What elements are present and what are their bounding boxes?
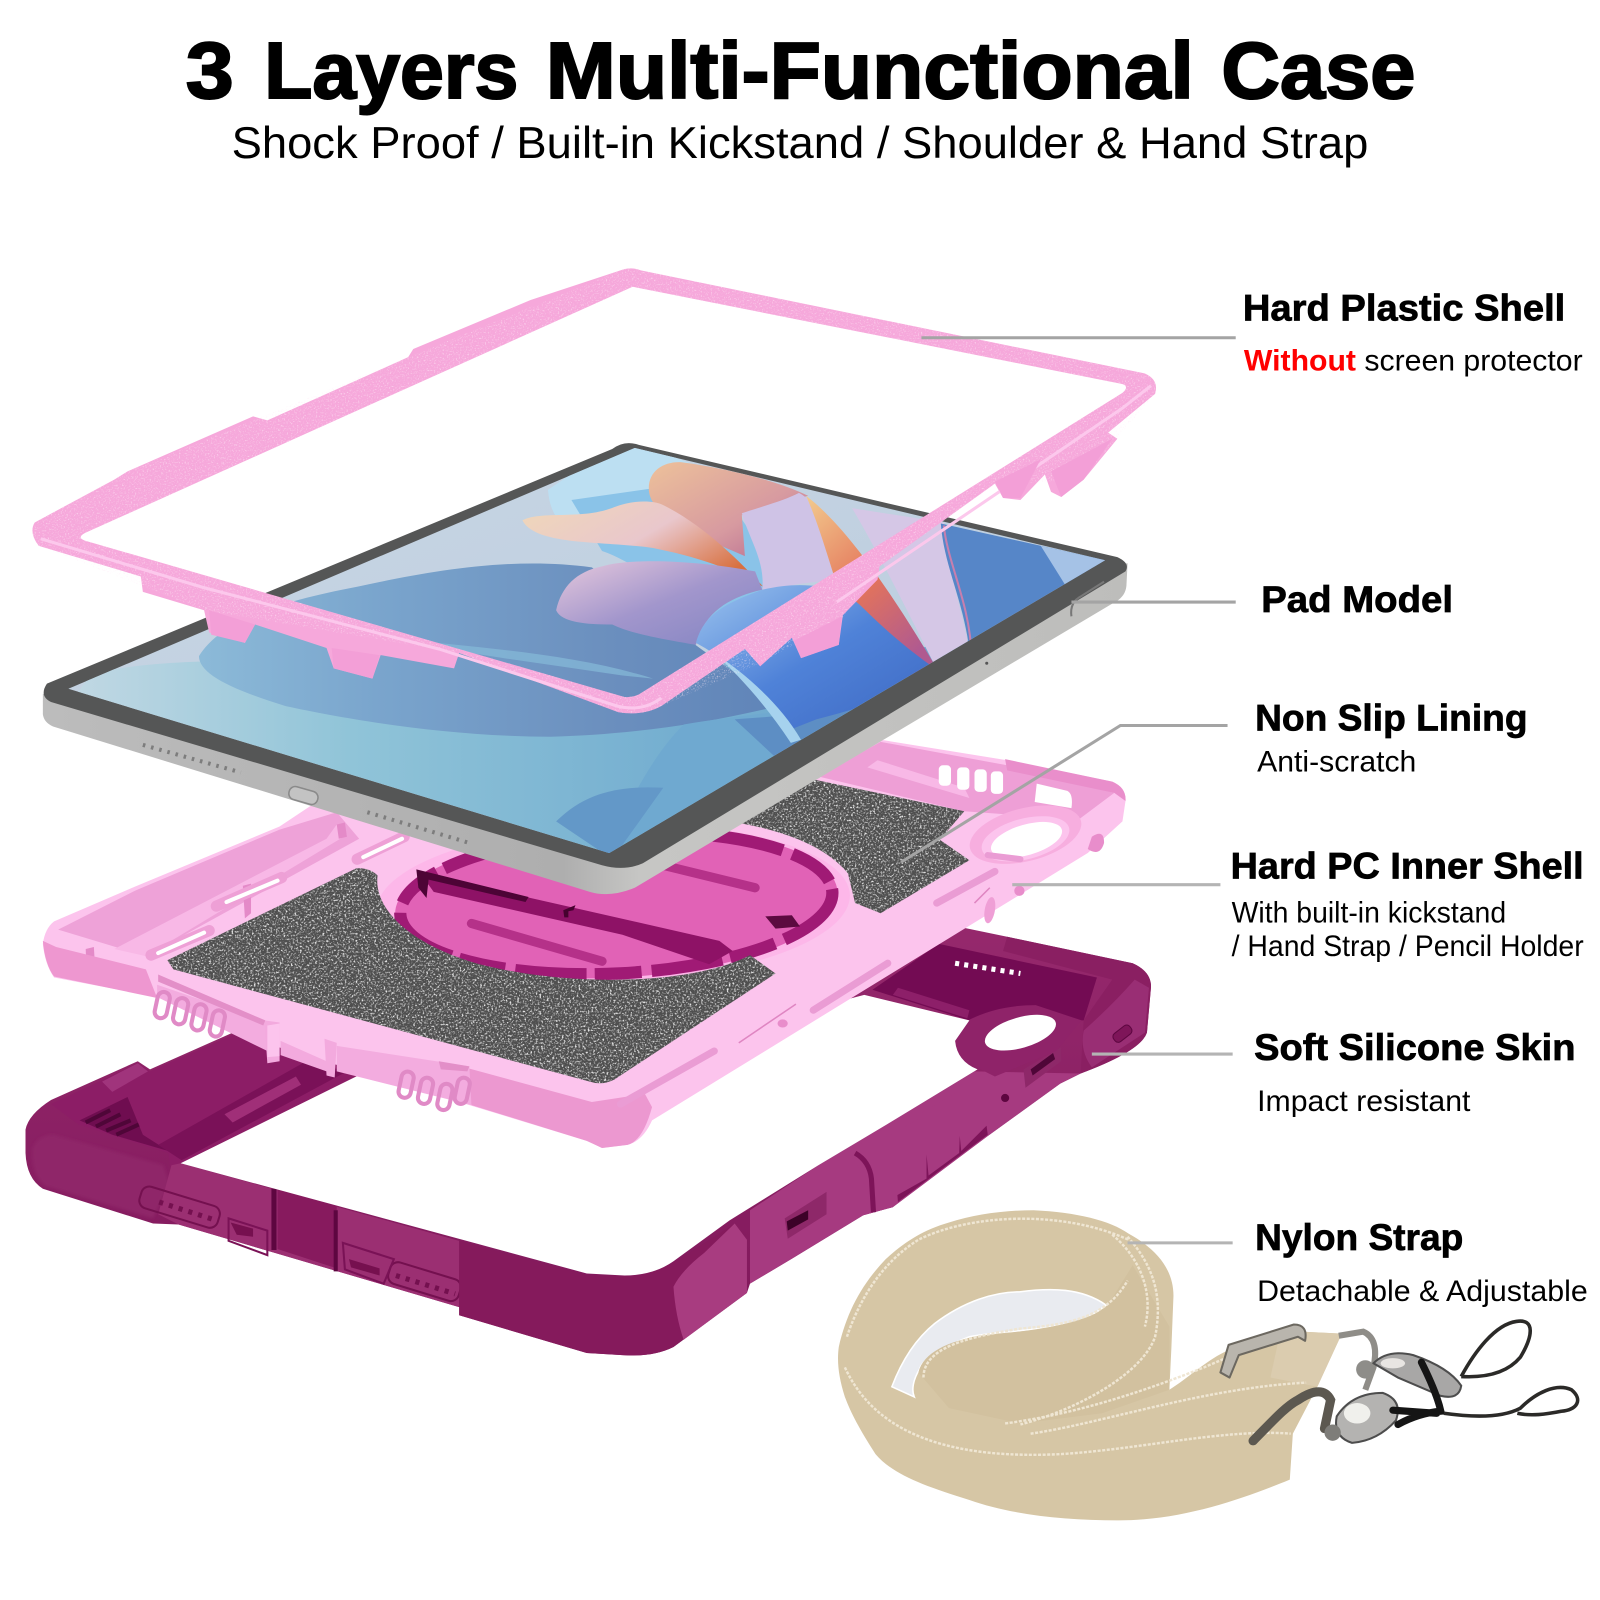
leader line: soft silicone skin	[1092, 1053, 1233, 1056]
heading: Soft Silicone Skin	[1254, 1027, 1576, 1068]
right side strip	[750, 1071, 1081, 1284]
lower right wave	[606, 696, 874, 853]
description: Without screen protector	[1244, 344, 1583, 377]
orange streak	[806, 496, 934, 682]
blue lower petal	[696, 585, 931, 731]
usb port	[287, 785, 319, 806]
magenta disc	[391, 817, 841, 989]
metal hook lower	[1253, 1392, 1331, 1441]
side button	[1071, 582, 1104, 616]
left tray posts	[86, 822, 347, 982]
title: Multi-Functional	[546, 26, 1194, 115]
hard plastic shell frame	[29, 265, 1161, 719]
leader line: hard PC inner shell	[1012, 883, 1220, 886]
frame bevel highlight	[41, 386, 1151, 708]
label: soft silicone skin	[1254, 1027, 1576, 1118]
cord loop lower	[1444, 1387, 1578, 1416]
left tray	[58, 812, 359, 956]
inner opening	[181, 995, 978, 1276]
description: Anti-scratch	[1257, 745, 1416, 778]
bottom vents	[153, 991, 471, 1111]
camera loop	[954, 1005, 1082, 1077]
big blue swoop	[199, 563, 786, 737]
light upper wash	[548, 448, 690, 515]
frame teeth	[209, 439, 1112, 679]
heading: Hard Plastic Shell	[1243, 287, 1565, 328]
camera opening	[981, 1008, 1060, 1057]
lilac lower petal	[556, 561, 762, 645]
leader line: nylon strap	[1128, 1241, 1233, 1244]
screen	[68, 448, 1105, 853]
heading: Hard PC Inner Shell	[1231, 846, 1584, 887]
description line 2: / Hand Strap / Pencil Holder	[1232, 930, 1584, 963]
metal slider	[1220, 1324, 1306, 1378]
frame speckle	[29, 265, 1161, 719]
description: Impact resistant	[1257, 1085, 1470, 1118]
strap stitch highlights	[845, 1219, 1306, 1455]
shell base	[43, 740, 1126, 1148]
heading: Nylon Strap	[1255, 1217, 1463, 1258]
hard PC inner shell layer	[43, 740, 1126, 1148]
label: hard plastic shell	[1243, 287, 1583, 377]
front side wall	[43, 941, 157, 998]
swivel clasps	[1373, 1353, 1461, 1397]
right rim slots	[620, 871, 995, 1104]
centre lilac petal	[742, 493, 833, 590]
speaker grille right	[386, 1260, 463, 1303]
top right corner	[1003, 937, 1151, 1073]
label: pad model: Pad Model	[1261, 579, 1453, 620]
strap body	[838, 1210, 1342, 1520]
label: hard PC inner shell	[1231, 846, 1584, 963]
label: nylon strap	[1255, 1217, 1588, 1308]
blue centre petal	[572, 489, 763, 622]
soft silicone skin layer	[26, 918, 1151, 1355]
right tray windows	[939, 765, 1072, 808]
silicone body	[26, 918, 1151, 1355]
left peach petal	[522, 501, 763, 587]
button cut-outs	[231, 1222, 380, 1276]
front right corner	[459, 1223, 747, 1355]
label: non slip lining	[1255, 698, 1528, 778]
strap opening	[892, 1290, 1106, 1397]
leader line: non slip lining	[901, 726, 1228, 862]
silver body	[43, 563, 1128, 894]
leader line: pad model	[1071, 601, 1236, 604]
top peach petal	[649, 462, 808, 556]
cyan lower area	[78, 640, 969, 853]
right tray	[818, 742, 1114, 827]
right blue panel	[941, 523, 1105, 651]
connector tabs	[264, 1020, 337, 1078]
leader line: hard plastic shell	[921, 336, 1236, 339]
speaker grille left	[137, 1184, 222, 1230]
cord loop upper	[1461, 1321, 1530, 1377]
black cord	[1393, 1362, 1441, 1424]
speaker holes	[143, 745, 472, 844]
strap shading	[918, 1265, 1169, 1423]
description: Detachable & Adjustable	[1257, 1275, 1588, 1308]
description line 1: With built-in kickstand	[1232, 896, 1506, 929]
non slip lining	[167, 780, 969, 1083]
left corner interior	[51, 1020, 362, 1168]
wallpaper	[61, 439, 1105, 878]
centre edge strip	[158, 1163, 459, 1307]
ring rim	[374, 816, 853, 990]
title: Layers	[264, 26, 518, 115]
camera ring	[964, 795, 1087, 874]
title	[186, 26, 1415, 115]
title: Case	[1221, 26, 1415, 115]
pad model layer	[43, 439, 1128, 894]
bezel	[44, 443, 1127, 868]
heading: Non Slip Lining	[1255, 698, 1528, 739]
metal hook upper	[1339, 1332, 1375, 1390]
ring teeth	[397, 821, 836, 985]
nylon strap	[838, 1210, 1578, 1520]
dark kick handle	[420, 873, 733, 964]
white slots	[151, 837, 404, 955]
frame body	[32, 268, 1156, 713]
side button	[1111, 1023, 1134, 1044]
strip ribs	[893, 1088, 988, 1202]
subtitle: Shock Proof / Built-in Kickstand / Shoulder & Hand Strap	[232, 117, 1368, 168]
title: 3	[186, 26, 234, 115]
side port	[785, 1192, 827, 1239]
corner highlight	[32, 1135, 169, 1218]
right lilac ribbons	[852, 508, 969, 663]
top interior	[872, 944, 1097, 1020]
